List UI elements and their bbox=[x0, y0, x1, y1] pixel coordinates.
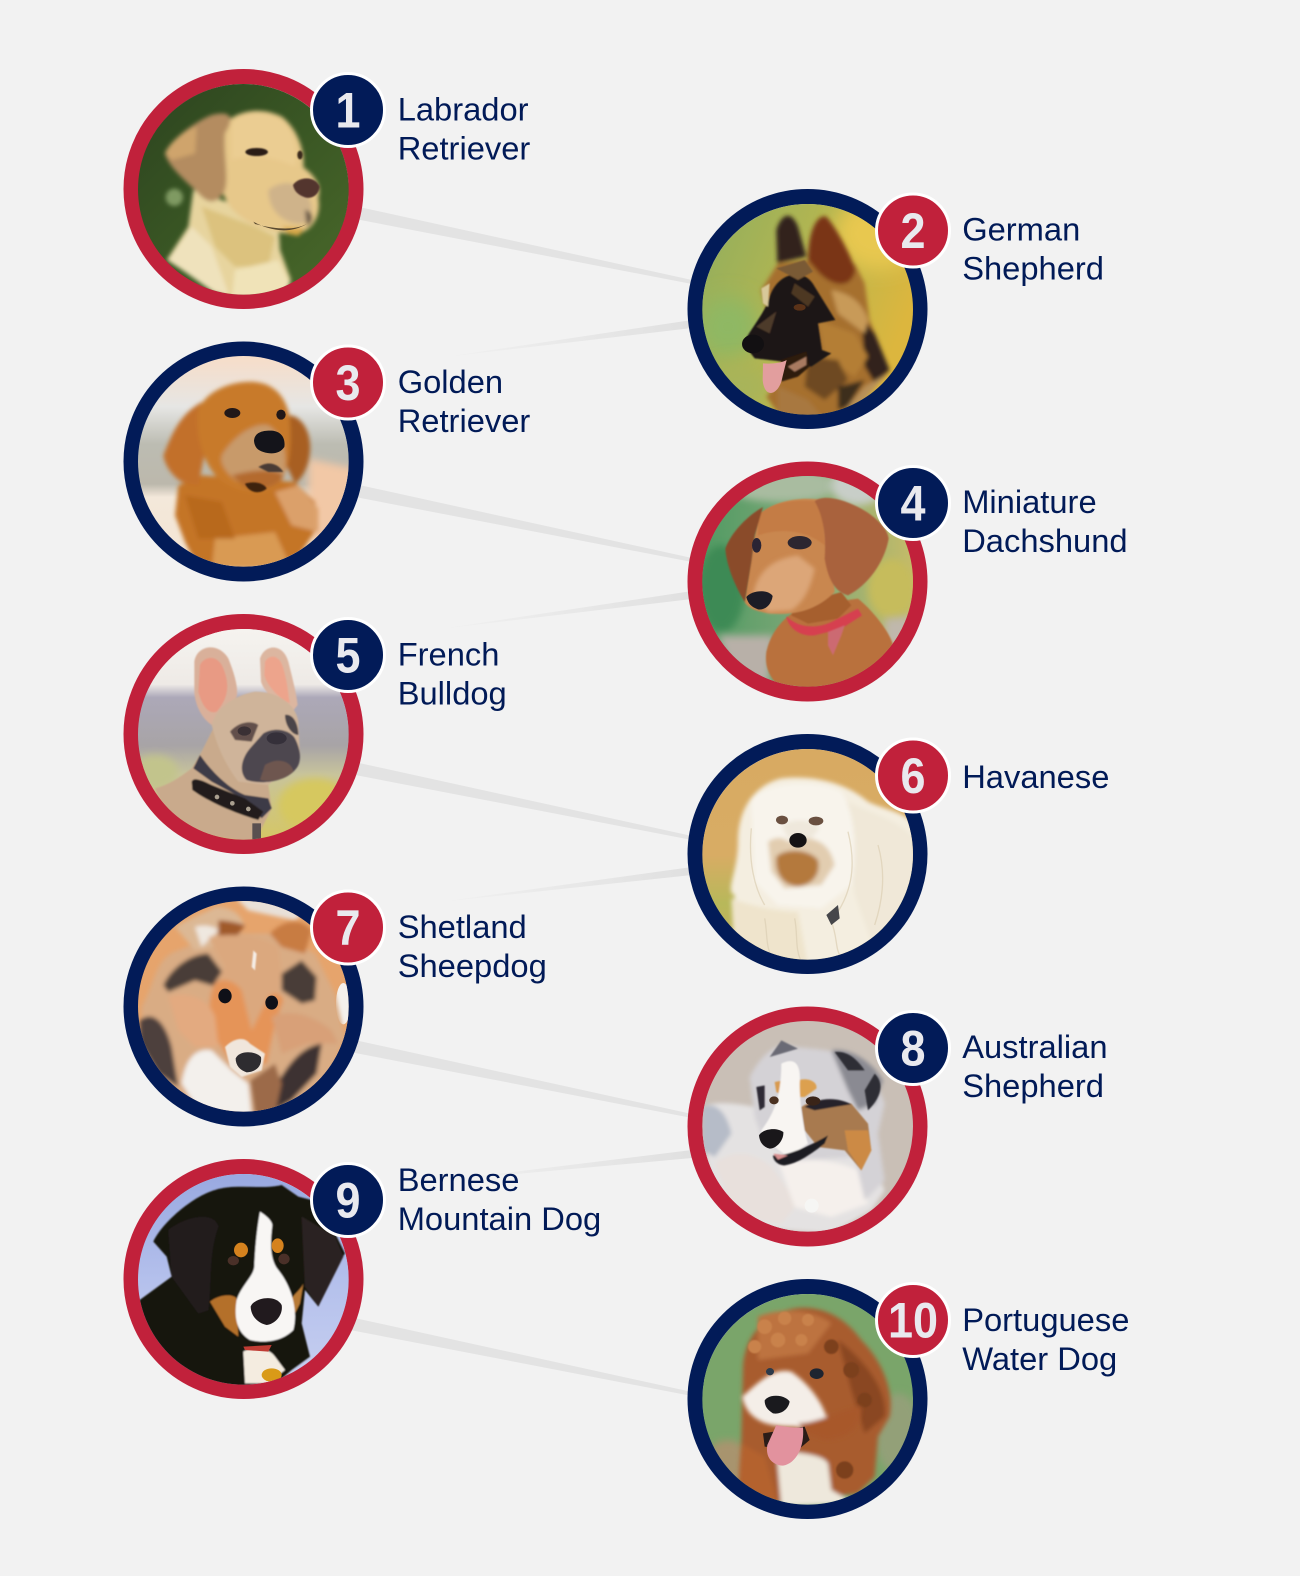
ring bbox=[131, 1166, 356, 1392]
label: Australian bbox=[962, 1028, 1108, 1065]
badge: 3: 3 bbox=[336, 355, 360, 411]
ring bbox=[131, 622, 356, 846]
badge: 9 bbox=[312, 1164, 384, 1236]
photo: australian shepherd bbox=[698, 1017, 918, 1237]
label: Shetland bbox=[398, 908, 527, 945]
panel: 4 Miniature Dachshund bbox=[695, 465, 1128, 694]
panel: 1 Labrador Retriever bbox=[131, 74, 530, 302]
label: Retriever bbox=[398, 130, 530, 166]
panel: 6 Havanese bbox=[695, 739, 1109, 966]
photo: shetland sheepdog bbox=[135, 897, 355, 1117]
panel: 10 Portuguese Water Dog bbox=[695, 1284, 1129, 1512]
label: Bernese bbox=[398, 1161, 519, 1198]
panel: 7 Shetland Sheepdog bbox=[131, 891, 547, 1119]
photo: french bulldog bbox=[132, 625, 355, 845]
badge: 7: 7 bbox=[336, 900, 360, 956]
badge: 4 bbox=[876, 466, 950, 540]
label: Miniature bbox=[962, 483, 1097, 520]
badge: 3 bbox=[312, 346, 384, 419]
ring bbox=[695, 742, 920, 966]
ring bbox=[131, 76, 356, 302]
label: Dachshund bbox=[962, 522, 1128, 559]
badge: 6: 6 bbox=[900, 748, 926, 804]
photo: german shepherd bbox=[702, 204, 913, 415]
badge: 4: 4 bbox=[900, 476, 926, 532]
badge: 10: 10 bbox=[888, 1292, 938, 1348]
photo: miniature dachshund bbox=[702, 476, 913, 687]
label: Labrador bbox=[398, 90, 529, 128]
photo: portuguese water dog bbox=[698, 1290, 921, 1510]
label: Retriever bbox=[398, 402, 530, 439]
panel: 5 French Bulldog bbox=[131, 618, 507, 846]
ring bbox=[695, 1014, 920, 1239]
badge: 10 bbox=[876, 1284, 950, 1356]
photo: labrador bbox=[135, 80, 355, 300]
panel: 8 Australian Shepherd bbox=[695, 1012, 1108, 1239]
badge: 8: 8 bbox=[900, 1020, 926, 1076]
label: Water Dog bbox=[962, 1340, 1117, 1377]
badge: 7 bbox=[312, 891, 384, 964]
label: Bulldog bbox=[398, 674, 507, 712]
ring bbox=[131, 349, 356, 574]
badge: 2 bbox=[876, 194, 950, 267]
label: German bbox=[962, 210, 1080, 248]
label: Havanese bbox=[962, 758, 1109, 795]
label: Shepherd bbox=[962, 1067, 1104, 1104]
badge: 1 bbox=[312, 74, 384, 146]
badge: 8 bbox=[876, 1012, 950, 1084]
connector wedges bbox=[350, 205, 692, 1396]
label: French bbox=[398, 636, 499, 672]
label: Sheepdog bbox=[398, 947, 547, 984]
label: Shepherd bbox=[962, 250, 1104, 286]
badge: 2: 2 bbox=[900, 203, 926, 259]
label: Portuguese bbox=[962, 1301, 1129, 1338]
badge: 9: 9 bbox=[336, 1172, 360, 1228]
ring bbox=[695, 1286, 920, 1512]
ring bbox=[131, 894, 356, 1119]
photo: bernese mountain dog bbox=[135, 1170, 355, 1390]
badge: 5: 5 bbox=[336, 628, 360, 684]
panel: 3 Golden Retriever bbox=[131, 346, 530, 574]
label: Golden bbox=[398, 363, 503, 400]
panel: 9 Bernese Mountain Dog bbox=[131, 1161, 601, 1392]
ring bbox=[695, 196, 920, 422]
badge: 1: 1 bbox=[336, 82, 360, 138]
photo: golden retriever bbox=[135, 352, 355, 572]
photo: havanese bbox=[698, 745, 918, 965]
panel: 2 German Shepherd bbox=[695, 194, 1104, 422]
ring bbox=[695, 469, 920, 694]
label: Mountain Dog bbox=[398, 1200, 601, 1237]
badge: 5 bbox=[312, 618, 384, 692]
badge: 6 bbox=[876, 739, 950, 812]
